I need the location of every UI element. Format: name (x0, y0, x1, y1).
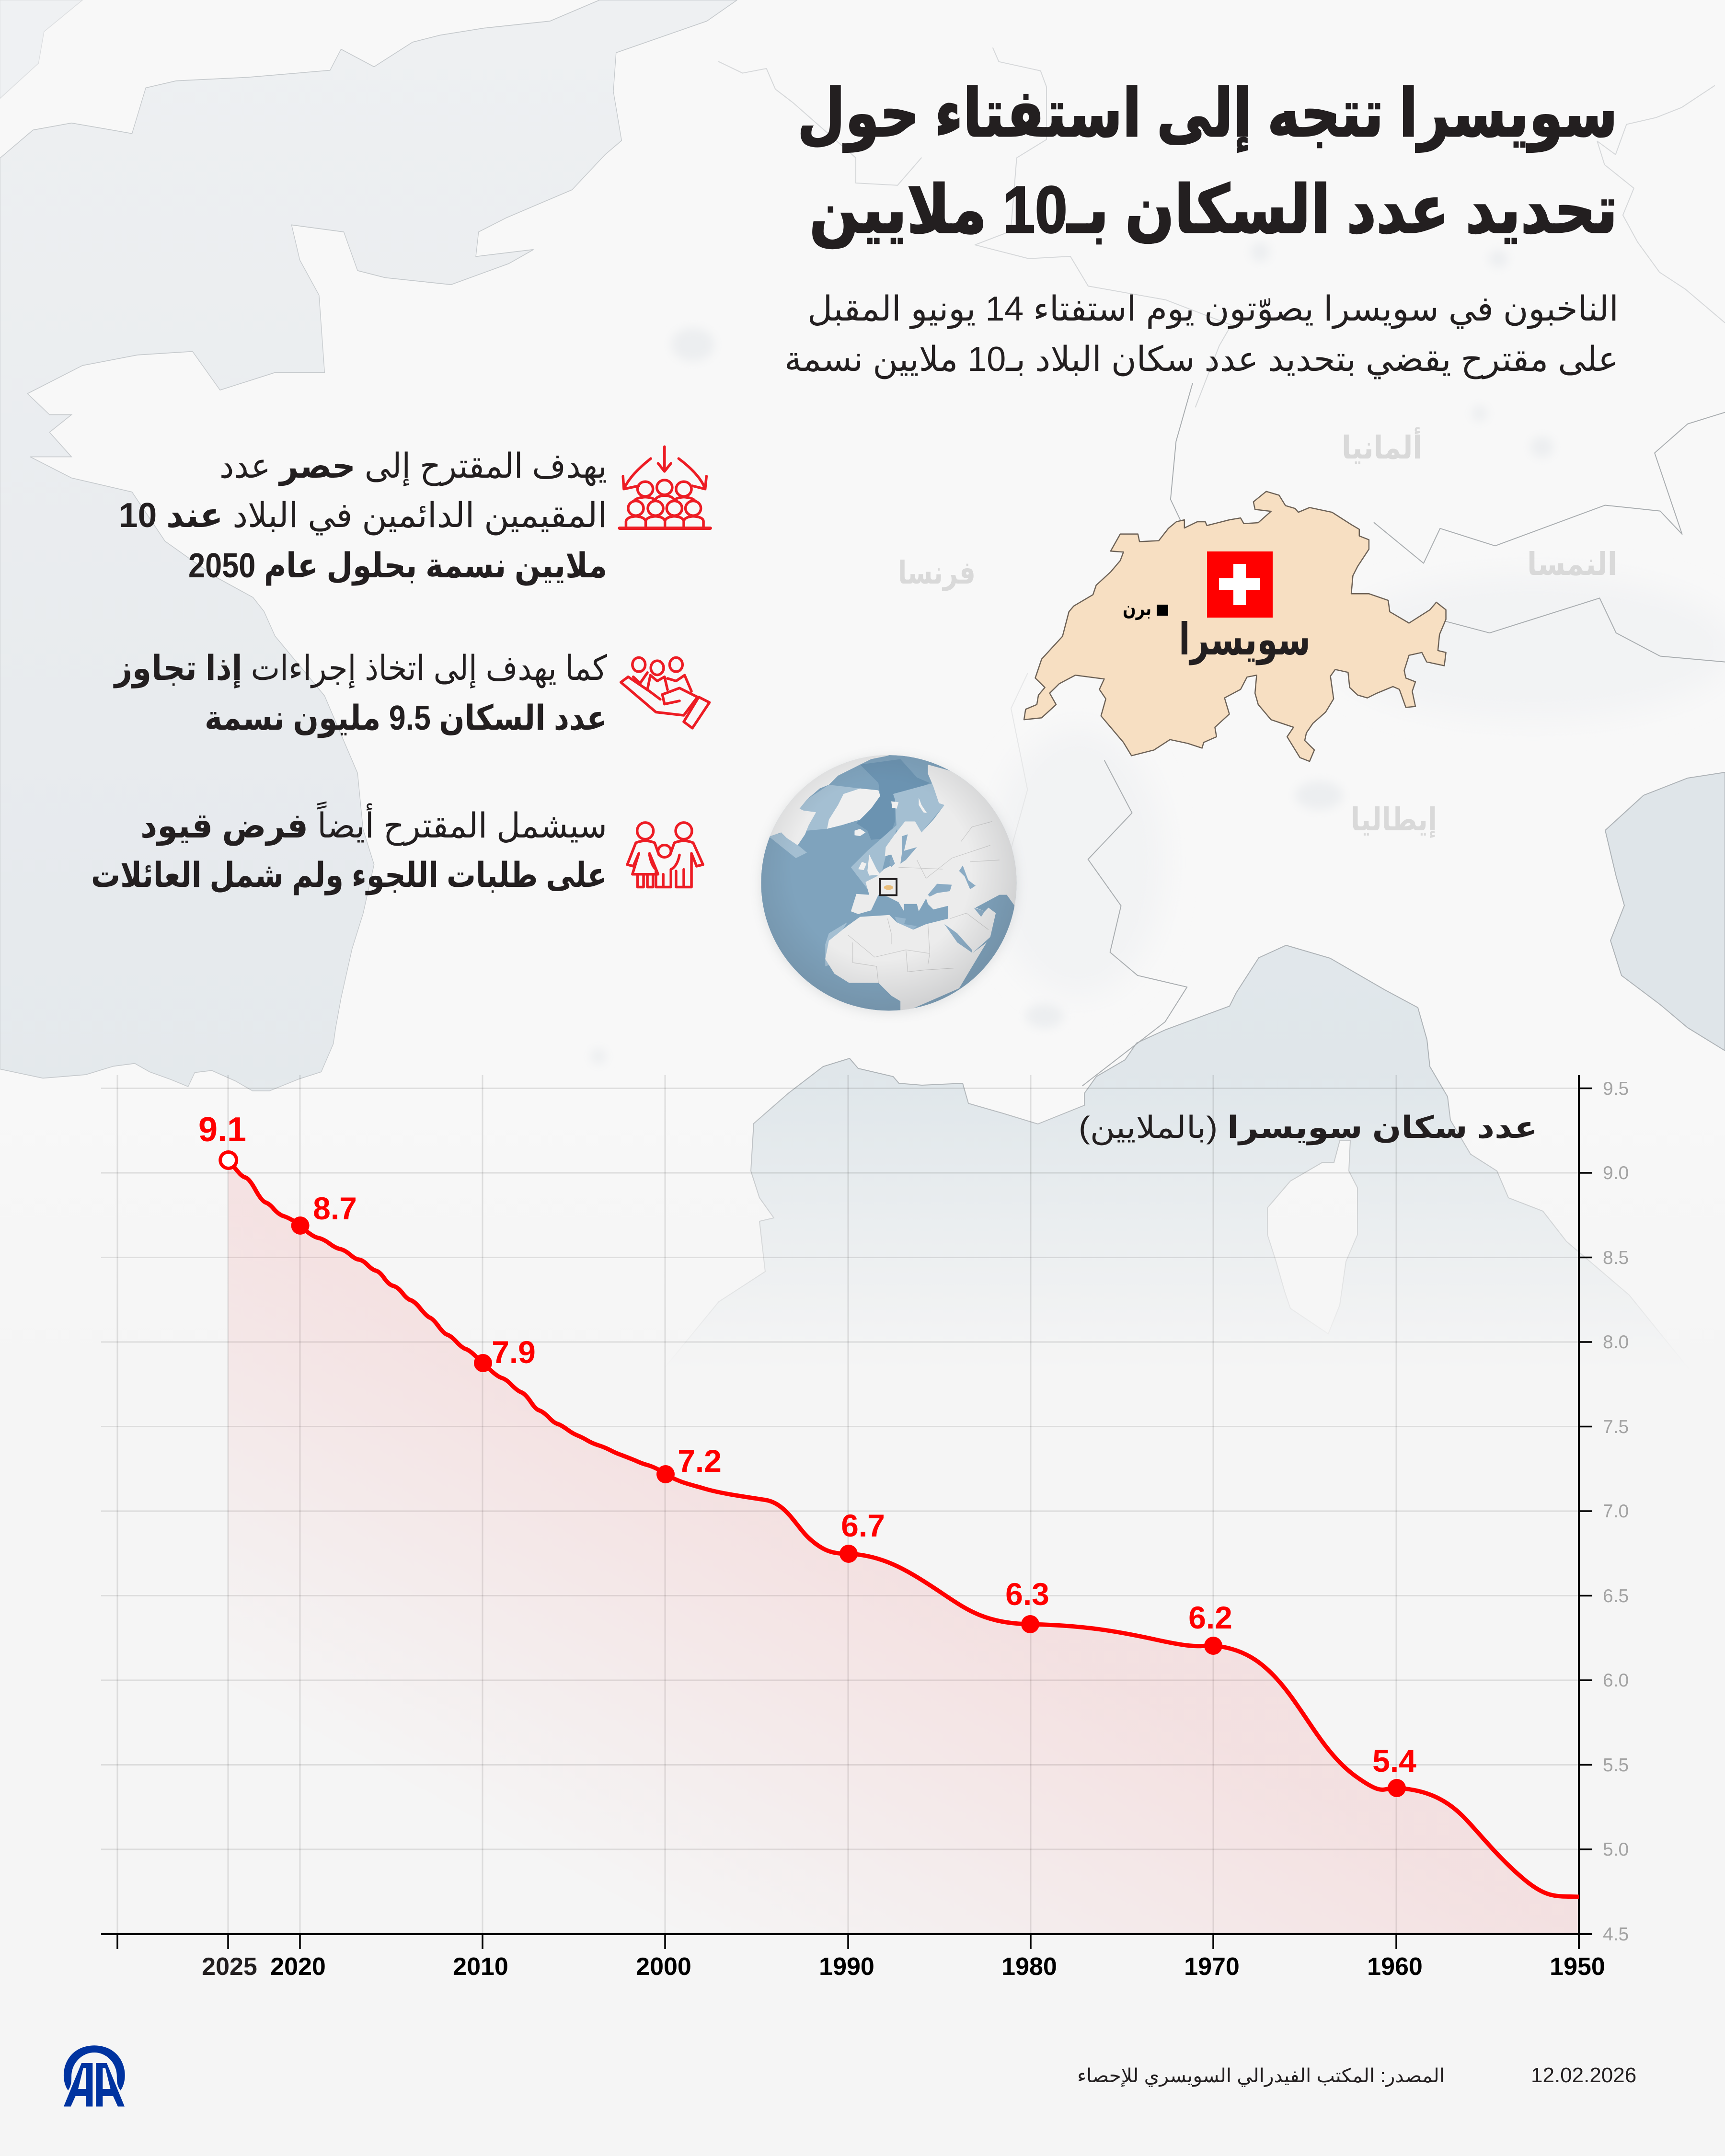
borders Alps (1000, 383, 1725, 1086)
data labels: 6.7 (841, 1508, 885, 1543)
data labels: 6.3 (1005, 1576, 1049, 1612)
footer source: المصدر: المكتب الفيدرالي السويسري للإحصاء (1077, 2065, 1445, 2087)
x axis labels: 1990 (819, 1953, 874, 1981)
text: limit residents: ملايين نسمة بحلول عام 2050 (188, 547, 607, 586)
subtitle: الناخبون في سويسرا يصوّتون يوم استفتاء 14 يونيو المقبل (807, 290, 1619, 329)
data labels: 6.2 (1188, 1600, 1232, 1635)
data labels: 7.2 (678, 1443, 722, 1479)
Arctic islands (891, 798, 927, 813)
flag: Switzerland (1207, 551, 1273, 618)
sea: Bristol Channel corner (0, 0, 82, 98)
text: limit residents: يهدف المقترح إلى حصر عدد (219, 447, 607, 486)
inland seas (889, 834, 985, 952)
title (797, 77, 1618, 249)
label: Switzerland: سويسرا (1179, 615, 1311, 665)
globe borders (848, 822, 1000, 983)
sea: Atlantic and English Channel (0, 0, 737, 1091)
y axis labels: 8.0 (1603, 1332, 1629, 1353)
Switzerland on globe (884, 885, 893, 890)
icon: hand holding people (621, 657, 710, 728)
Mediterranean shelf (895, 917, 917, 929)
data points (220, 1152, 1406, 1797)
locator globe (759, 748, 1036, 1014)
title: تحديد عدد السكان بـ10 ملايين (809, 173, 1618, 249)
area fill under line (228, 1160, 1579, 1934)
urban and terrain patches (591, 242, 1553, 1064)
logo: AA (64, 2045, 125, 2107)
label: Germany: ألمانيا (1342, 427, 1422, 465)
y axis labels: 5.0 (1603, 1839, 1629, 1860)
text: measures above 9.5 million: كما يهدف إلى اتخاذ إجراءات إذا تجاوز (113, 649, 608, 688)
population chart (101, 1075, 1629, 1981)
text: measures above 9.5 million (113, 649, 608, 738)
Switzerland shape (1024, 492, 1446, 761)
y axis labels: 9.5 (1603, 1078, 1629, 1099)
subtitle (784, 290, 1619, 379)
x axis labels: 2000 (636, 1953, 691, 1981)
Greenland (827, 789, 880, 829)
Iceland (854, 829, 865, 836)
icon: crowd with arrows (620, 447, 710, 528)
map: Switzerland highlighted (1024, 492, 1446, 761)
gridlines (101, 1075, 1579, 1934)
footer date: 12.02.2026 (1531, 2064, 1636, 2087)
label: Italy: إيطاليا (1351, 802, 1437, 838)
text: limit residents: المقيمين الدائمين في البلاد عند 10 (119, 496, 607, 536)
text: asylum and family restrictions: على طلبات اللجوء ولم شمل العائلات (91, 856, 607, 895)
y axis labels: 7.5 (1603, 1417, 1629, 1437)
y axis labels: 7.0 (1603, 1501, 1629, 1522)
subtitle: على مقترح يقضي بتحديد عدد سكان البلاد بـ10 ملايين نسمة (784, 340, 1619, 379)
Eurasia and Africa (825, 765, 1036, 1014)
y axis labels: 4.5 (1603, 1924, 1629, 1945)
icon: family (627, 823, 703, 887)
sea: Adriatic (1605, 772, 1725, 1051)
country borders (719, 48, 1725, 1086)
locator square (880, 879, 897, 895)
data labels: 5.4 (1372, 1743, 1416, 1778)
data labels: 7.9 (492, 1334, 536, 1370)
y axis labels (1603, 1078, 1629, 1945)
shading (761, 755, 1017, 1011)
x axis labels: 1970 (1184, 1953, 1240, 1981)
fade of map into chart background (0, 1073, 1725, 1370)
text: asylum and family restrictions: سيشمل المقترح أيضاً فرض قيود (140, 801, 607, 846)
x axis labels: 2025 (202, 1953, 257, 1981)
label: Austria: النمسا (1527, 546, 1617, 582)
y axis labels: 6.5 (1603, 1586, 1629, 1606)
data labels (198, 1111, 1416, 1778)
label: France: فرنسا (898, 555, 976, 591)
capital marker: Bern: برن (1123, 597, 1151, 620)
borders north France (719, 48, 1231, 407)
arctic deep (856, 759, 930, 840)
sea: Mediterranean (647, 945, 1725, 1485)
continental shelf (769, 783, 944, 966)
text: asylum and family restrictions (91, 801, 607, 895)
y axis labels: 8.5 (1603, 1248, 1629, 1268)
land: Corsica (1267, 1141, 1357, 1334)
data labels: 9.1 (198, 1111, 246, 1149)
alpine terrain shading (992, 575, 1725, 997)
x axis labels: 2010 (453, 1953, 508, 1981)
key point 2 (113, 649, 710, 738)
borders east Germany (1597, 86, 1725, 322)
key point 1 (119, 447, 710, 586)
y axis labels: 5.5 (1603, 1755, 1629, 1776)
population line (229, 1160, 1579, 1897)
y axis labels: 6.0 (1603, 1670, 1629, 1691)
x axis labels: 2020 (270, 1953, 326, 1981)
x axis labels (202, 1953, 1605, 1981)
text: limit residents (119, 447, 607, 586)
data labels: 8.7 (313, 1191, 357, 1226)
x axis labels: 1950 (1550, 1953, 1605, 1981)
Americas (770, 755, 889, 845)
x axis labels: 1980 (1001, 1953, 1057, 1981)
x axis labels: 1960 (1367, 1953, 1423, 1981)
key point 3 (91, 801, 703, 895)
map labels (898, 427, 1617, 838)
UK and Ireland (858, 854, 880, 875)
text: measures above 9.5 million: عدد السكان 9.5 مليون نسمة (205, 699, 607, 738)
chart title: عدد سكان سويسرا (بالملايين) (1079, 1110, 1538, 1146)
y axis labels: 9.0 (1603, 1163, 1629, 1183)
axes (101, 1075, 1592, 1949)
